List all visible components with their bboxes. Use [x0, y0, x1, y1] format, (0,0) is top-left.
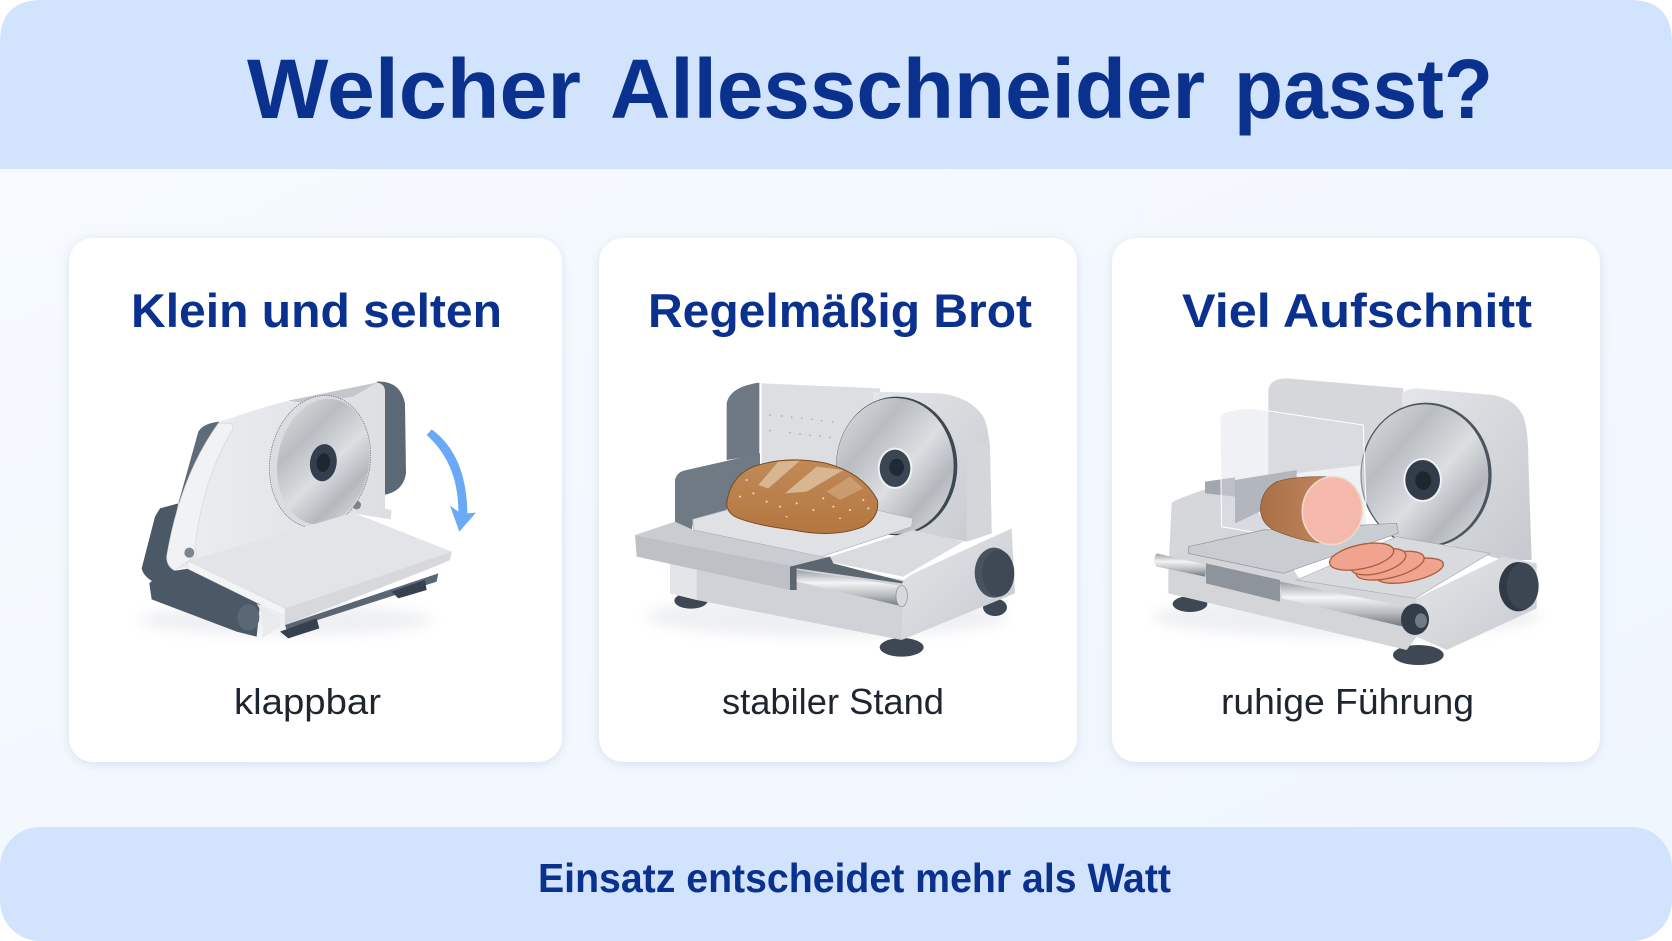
- footer band: [0, 827, 1672, 941]
- panel: Regelmäßig Brot: [599, 238, 1077, 762]
- heading: Viel Aufschnitt: Viel Aufschnitt: [1182, 284, 1532, 337]
- ham roll: [1261, 474, 1366, 548]
- cutting guard: [1220, 408, 1367, 543]
- title: passt?: [1234, 42, 1493, 136]
- panel: Viel Aufschnitt: [1112, 238, 1600, 762]
- footer text: Einsatz entscheidet mehr als Watt: [538, 855, 1171, 901]
- ham slices: [1327, 538, 1445, 588]
- panel: Klein und selten: [69, 238, 562, 762]
- heading: Regelmäßig Brot: Regelmäßig Brot: [648, 284, 1032, 337]
- illustration: folding slicer: [140, 382, 476, 638]
- title: Allesschneider: [610, 42, 1205, 136]
- caption: ruhige Führung: ruhige Führung: [1221, 681, 1474, 722]
- title: [247, 42, 1493, 136]
- bread loaf: [727, 460, 878, 533]
- header band: [0, 0, 1672, 169]
- arrow: fold down: [427, 429, 476, 532]
- illustration: slicer with cold cuts: [1153, 378, 1540, 665]
- caption: stabiler Stand: stabiler Stand: [722, 681, 944, 722]
- caption: klappbar: klappbar: [234, 681, 381, 722]
- illustration: slicer with bread: [635, 383, 1015, 657]
- heading: Klein und selten: Klein und selten: [131, 284, 502, 337]
- title: Welcher: [247, 42, 581, 136]
